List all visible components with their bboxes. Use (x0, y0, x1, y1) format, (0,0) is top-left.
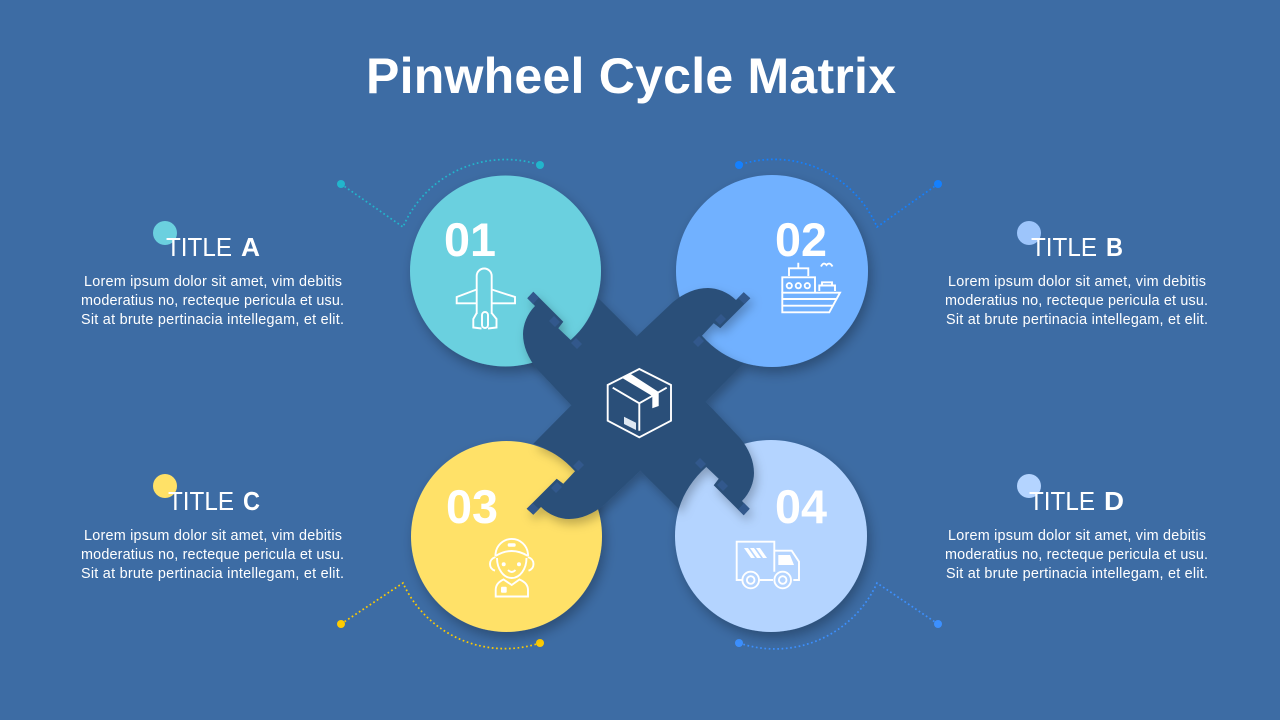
text block: title B: moderatius no, recteque pericula et usu. (945, 293, 1208, 309)
text block: title D: TITLE (1029, 486, 1095, 516)
text block: title D: D (1104, 486, 1124, 516)
connector: 04 dotted line (735, 583, 942, 649)
text block: title D: Sit at brute pertinacia intellegam, et elit. (946, 566, 1208, 582)
text block: title B: B (1106, 232, 1123, 262)
icon: delivery truck (737, 542, 799, 588)
text block: title A: TITLE (166, 232, 232, 262)
text block: title C: Lorem ipsum dolor sit amet, vim debitis (84, 528, 342, 544)
text block: title D (945, 474, 1208, 582)
text block: title C: C (243, 486, 260, 516)
text block: title A: Lorem ipsum dolor sit amet, vim debitis (84, 274, 342, 290)
circle 03 (411, 441, 602, 632)
accent dot B (1017, 221, 1041, 245)
text block: title A: moderatius no, recteque pericula et usu. (81, 293, 344, 309)
accent dot A (153, 221, 177, 245)
number 01: 01 (444, 213, 496, 266)
text block: title B: Lorem ipsum dolor sit amet, vim debitis (948, 274, 1206, 290)
circle 01 (410, 176, 601, 366)
text block: title B: TITLE (1031, 232, 1097, 262)
text block: title B (945, 221, 1208, 328)
connector: 02 dotted line (735, 159, 942, 227)
text block: title C: TITLE (168, 486, 234, 516)
connector: 01 dotted line (337, 160, 544, 227)
title: Pinwheel Cycle Matrix (366, 48, 896, 104)
text block: title D: Lorem ipsum dolor sit amet, vim debitis (948, 528, 1206, 544)
number 03: 03 (446, 480, 498, 533)
pinwheel cross (523, 288, 754, 519)
number 02: 02 (775, 213, 827, 266)
text block: title C (81, 474, 344, 582)
icon: package box (608, 369, 671, 437)
text block: title A: Sit at brute pertinacia intellegam, et elit. (81, 312, 344, 328)
text block: title B: Sit at brute pertinacia intellegam, et elit. (946, 312, 1208, 328)
text block: title D: moderatius no, recteque pericula et usu. (945, 547, 1208, 563)
icon: airplane (457, 269, 515, 328)
text block: title C: Sit at brute pertinacia intellegam, et elit. (81, 566, 344, 582)
text block: title A: A (241, 232, 260, 262)
icon: worker (490, 539, 534, 596)
circle 04 (675, 440, 867, 632)
text block: title C: moderatius no, recteque pericula et usu. (81, 547, 344, 563)
number 04: 04 (775, 480, 827, 533)
icon: ship (782, 263, 840, 312)
circle 02 (676, 175, 868, 367)
accent dot D (1017, 474, 1041, 498)
text block: title A (81, 221, 344, 328)
accent dot C (153, 474, 177, 498)
connector: 03 dotted line (337, 583, 544, 649)
